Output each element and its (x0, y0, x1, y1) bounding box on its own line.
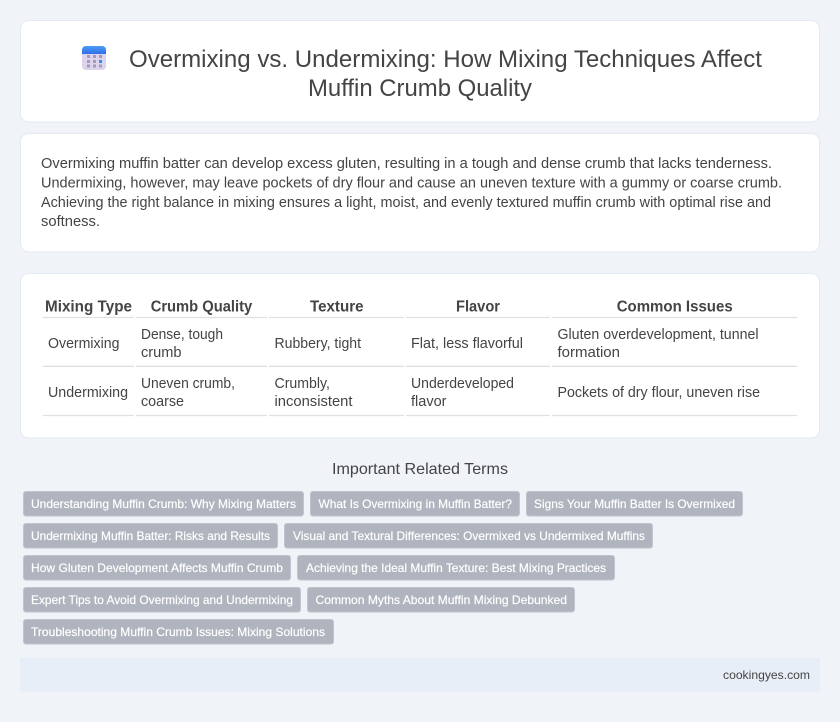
panel: description (20, 134, 820, 252)
related term tags: Common Myths About Muffin Mixing Debunked (316, 593, 567, 607)
table row: undermixing: coarse (141, 394, 184, 410)
footer: cookingyes.com (723, 668, 810, 682)
related term tags: Signs Your Muffin Batter Is Overmixed (534, 497, 735, 511)
table header: Crumb Quality (151, 298, 252, 316)
related term tags: Understanding Muffin Crumb: Why Mixing Matters (31, 497, 296, 511)
table row: overmixing: Gluten overdevelopment, tunnel (558, 327, 758, 343)
related term tags: Expert Tips to Avoid Overmixing and Undermixing (31, 593, 293, 607)
table row: overmixing: Rubbery, tight (274, 336, 361, 352)
table row: overmixing (48, 327, 758, 361)
text block: description (41, 156, 782, 230)
related term tags: What Is Overmixing in Muffin Batter? (318, 497, 512, 511)
title: Overmixing vs. Undermixing: How Mixing Techniques Affect (129, 46, 762, 73)
table row: overmixing: Flat, less flavorful (411, 336, 523, 352)
panel: comparison table (20, 274, 820, 438)
title: Muffin Crumb Quality (308, 75, 532, 102)
related term tags (24, 492, 742, 644)
table row: undermixing: Crumbly, (274, 376, 330, 392)
table row: overmixing: formation (558, 345, 620, 361)
table row: overmixing: Overmixing (48, 336, 120, 352)
table header: Common Issues (617, 298, 733, 316)
icon: calendar (82, 46, 106, 70)
text block: description: Overmixing muffin batter can develop excess gluten, resulting in a tough and dense crumb that lacks tenderness. (41, 156, 772, 172)
text block: description: softness. (41, 214, 100, 230)
table row: undermixing: Underdeveloped (411, 376, 514, 392)
table row: undermixing: inconsistent (274, 394, 352, 410)
title (129, 46, 762, 102)
table row: undermixing: Pockets of dry flour, uneven rise (558, 385, 760, 401)
related term tags: Troubleshooting Muffin Crumb Issues: Mixing Solutions (31, 625, 325, 639)
related term tags: Undermixing Muffin Batter: Risks and Results (31, 529, 270, 543)
panel: header (20, 20, 820, 122)
related term tags: Visual and Textural Differences: Overmixed vs Undermixed Muffins (293, 529, 645, 543)
text block: description: Achieving the right balance in mixing ensures a light, moist, and evenly textured muffin crumb with optimal rise and (41, 195, 771, 211)
table header: Mixing Type (45, 298, 132, 316)
table row: undermixing: flavor (411, 394, 447, 410)
table header: Flavor (456, 298, 500, 316)
related term tags: How Gluten Development Affects Muffin Crumb (31, 561, 283, 575)
table row: undermixing: Uneven crumb, (141, 376, 235, 392)
footer (20, 658, 820, 692)
table header: Texture (310, 298, 364, 316)
table row: overmixing: Dense, tough (141, 327, 223, 343)
table row: undermixing (48, 376, 760, 410)
heading: related terms: Important Related Terms (332, 461, 508, 478)
table header (45, 298, 733, 316)
table row: undermixing: Undermixing (48, 385, 128, 401)
text block: description: Undermixing, however, may leave pockets of dry flour and cause an uneven texture with a gummy or coarse crumb. (41, 176, 782, 192)
related term tags: Achieving the Ideal Muffin Texture: Best Mixing Practices (306, 561, 606, 575)
table row: overmixing: crumb (141, 345, 182, 361)
